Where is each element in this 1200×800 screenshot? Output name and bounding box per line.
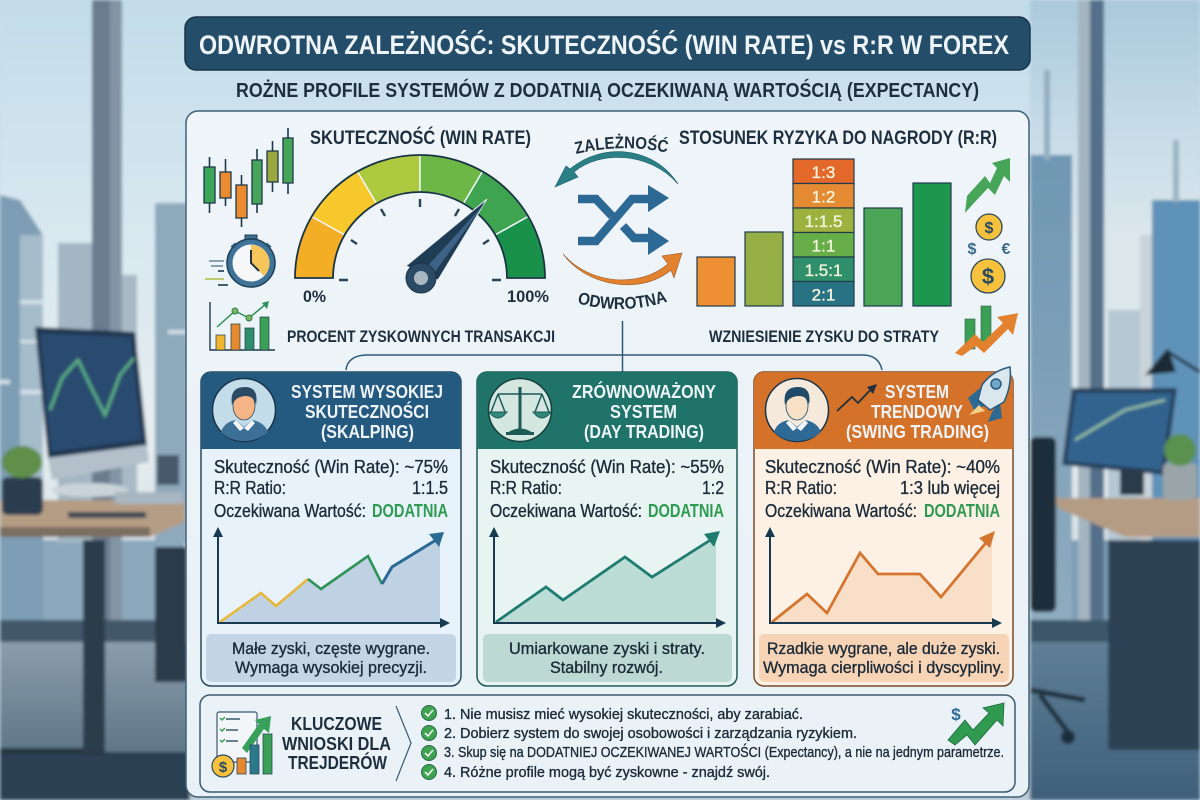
stats: Oczekiwana Wartość: [490,501,642,521]
icon: candlestick chart [204,128,293,227]
panel: key takeaways [200,695,1015,792]
stats: 1:2 [702,478,724,498]
arrow: teal curved [555,152,678,187]
stats [765,457,1000,521]
ratio stack: 1.5:1 [805,261,842,280]
icon: dollar and rising arrow [948,703,1004,745]
check icons [422,706,436,780]
main panel [186,111,1029,797]
caption [206,634,456,682]
icon: coins and currency [968,214,1011,293]
label: odwrotna: ODWROTNA [578,291,668,309]
ratio stack: 1:1 [812,236,835,256]
equity chart [213,527,450,628]
takeaways list: 3. Skup się na DODATNIEJ OCZEKIWANEJ WARTOŚCI (Expectancy), a nie na jednym parametrze. [444,743,1004,761]
inverse relation diagram [554,134,682,309]
title text: ODWROTNA ZALEŻNOŚĆ: SKUTECZNOŚĆ (WIN RATE) vs R:R W FOREX [199,29,1009,60]
win rate caption: PROCENT ZYSKOWNYCH TRANSAKCJI [287,327,555,346]
stats: Skuteczność (Win Rate): ~55% [490,457,724,477]
stats [214,457,448,521]
heading: (SWING TRADING) [846,422,989,442]
takeaways list [444,706,1004,781]
icon: checklist with bars: $ [219,759,228,776]
heading [572,381,716,442]
ratio stack: 1:3 [812,163,835,182]
heading: (SKALPING) [321,422,414,442]
ratio stack: 2:1 [812,286,835,304]
connector lines [346,321,882,372]
takeaways heading [282,714,391,773]
R:R heading: STOSUNEK RYZYKA DO NAGRODY (R:R) [679,128,997,149]
gauge labels: 0% [303,287,326,306]
icon: dollar and rising arrow: $ [951,705,961,724]
gauge: 100% [507,287,549,306]
stats: 1:3 lub więcej [900,478,1000,498]
arrow: orange curved [563,253,682,285]
stats: DODATNIA [648,501,724,521]
takeaways heading: TREJDERÓW [288,752,387,773]
card: high win rate system [201,372,461,686]
takeaways list: 1. Nie musisz mieć wysokiej skuteczności, aby zarabiać. [444,706,803,723]
caption [759,634,1009,682]
stats: Skuteczność (Win Rate): ~40% [765,457,1000,477]
subtitle: ROŻNE PROFILE SYSTEMÓW Z DODATNIĄ OCZEKIWANĄ WARTOŚCIĄ (EXPECTANCY) [236,78,979,102]
ratio stack: 1:1.5 [805,212,842,231]
ratio stack: 1:2 [812,188,835,206]
icon: rising green arrow [965,158,1010,213]
label: odwrotna [578,291,668,309]
card: trend system [754,367,1013,686]
icon: scales [488,378,552,442]
stats: Oczekiwana Wartość: [214,501,366,521]
icon: trend arrow [837,384,877,411]
icon: bars with orange arrow [955,306,1018,356]
takeaways heading: KLUCZOWE [291,714,382,734]
ratio stack [793,159,854,306]
stats: 1:1.5 [412,478,448,498]
caption: Stabilny rozwój. [550,658,663,677]
heading [291,382,443,442]
takeaways list: 2. Dobierz system do swojej osobowości i zarządzania ryzykiem. [444,725,857,742]
stats: R:R Ratio: [214,478,286,498]
card header [754,372,1013,449]
card header [201,372,461,449]
icon: coins and currency: $ [968,241,977,258]
needle [406,199,487,293]
icon: checklist with bars [212,712,272,777]
icon: crossing arrows [578,185,669,255]
R:R caption: WZNIESIENIE ZYSKU DO STRATY [709,327,940,346]
heading [846,382,989,442]
title banner [185,17,1030,70]
heading: SYSTEM [885,382,949,402]
avatar [212,378,276,442]
equity chart [489,527,726,628]
stats [490,457,724,521]
heading: SYSTEM [610,402,677,422]
heading: SKUTECZNOŚCI [305,401,429,422]
takeaways list: 4. Różne profile mogą być zyskowne - znajdź swój. [444,764,770,781]
chevron [396,706,411,781]
card: balanced system [477,372,737,686]
heading: (DAY TRADING) [584,422,704,442]
stats: DODATNIA [372,501,448,521]
icon: stopwatch [205,235,275,287]
caption: Wymaga wysokiej precyzji. [235,658,427,677]
stats: R:R Ratio: [765,478,837,498]
icon: rocket [968,367,1010,422]
icon: coins and currency: € [1002,241,1011,258]
equity chart [765,527,1002,628]
gauge [295,155,549,306]
stats: R:R Ratio: [490,478,562,498]
heading: SYSTEM WYSOKIEJ [291,382,443,402]
card header [477,372,737,449]
stats: Skuteczność (Win Rate): ~75% [214,457,448,477]
takeaways heading: WNIOSKI DLA [282,734,391,754]
icon: coins and currency: $ [985,220,994,237]
caption: Małe zyski, częste wygrane. [232,639,430,658]
stats: Oczekiwana Wartość: [765,501,917,521]
caption: Rzadkie wygrane, ale duże zyski. [767,639,1000,658]
caption: Umiarkowane zyski i straty. [509,639,705,658]
icon: coins and currency: $ [982,264,994,289]
gauge arc segments [295,155,545,278]
avatar [766,378,828,442]
R:R bar chart [697,159,951,306]
stats: DODATNIA [924,501,1000,521]
win rate heading: SKUTECZNOŚĆ (WIN RATE) [310,127,531,149]
heading: TRENDOWY [871,402,963,422]
icon: small chart [210,301,275,350]
caption: Wymaga cierpliwości i dyscypliny. [763,658,1004,677]
caption [483,634,732,682]
label: zależność: ZALEŻNOŚĆ [574,134,668,154]
gauge ticks [339,199,501,280]
heading: ZRÓWNOWAŻONY [572,381,716,402]
